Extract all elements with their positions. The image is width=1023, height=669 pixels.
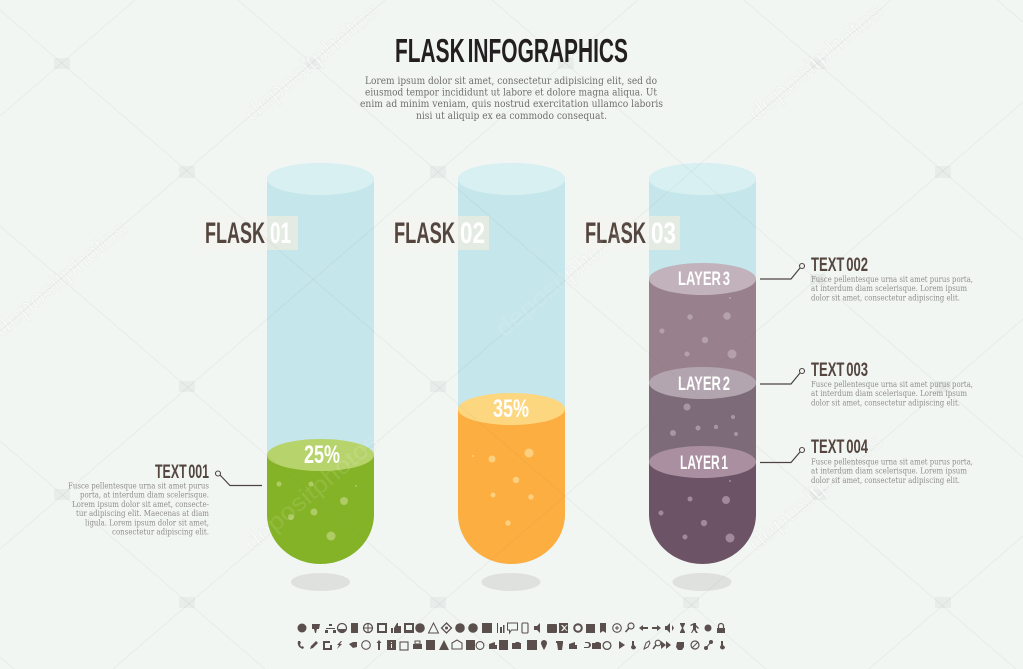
- body 001: ligula. Lorem ipsum dolor sit amet,: [85, 518, 209, 528]
- flask 2 bubbles: [472, 448, 534, 526]
- intro paragraph: nisi ut aliquip ex ea commodo consequat.: [416, 111, 607, 122]
- flask 1 percentage: 25%: [304, 441, 340, 469]
- body 003: [811, 380, 973, 408]
- flask 3 glass rim: [649, 163, 756, 195]
- watermark overlay: depositphotos: [239, 428, 385, 557]
- layer 2 label: LAYER 2: [678, 374, 730, 395]
- layer 2 body: [649, 383, 756, 470]
- shadow: flask 3: [672, 573, 732, 591]
- flask 2 liquid: [458, 409, 565, 564]
- flask 1 bubbles: [276, 482, 357, 540]
- flask 1 glass: [267, 163, 374, 564]
- intro paragraph: enim ad minim veniam, quis nostrud exercitation ullamco laboris: [360, 99, 663, 110]
- callout: text 001: [68, 462, 262, 536]
- watermark: depositphotos: [239, 428, 385, 557]
- watermark: depositphotos: [743, 0, 889, 127]
- shadow: flask 2: [482, 573, 540, 591]
- intro paragraph: Lorem ipsum dolor sit amet, consectetur adipisicing elit, sed do: [365, 76, 657, 87]
- body 002: dolor sit amet, consectetur adipiscing elit.: [811, 294, 960, 302]
- layer 3 body: [649, 279, 756, 390]
- body 004: Fusce pellentesque urna sit amet purus porta,: [811, 458, 973, 466]
- body 003: Fusce pellentesque urna sit amet purus porta,: [811, 380, 973, 389]
- icon row 2: [298, 640, 725, 650]
- connector dot 002: [800, 264, 804, 268]
- watermark overlay: depositphotos: [491, 214, 637, 343]
- connector dot 003: [800, 368, 804, 374]
- body 001: tur adipiscing elit. Maecenas at diam: [76, 509, 209, 518]
- layer 1 label: LAYER 1: [680, 453, 728, 474]
- label: flask 03: FLASK: [585, 217, 646, 250]
- body 004: at interdum diam scelerisque. Lorem ipsum: [811, 466, 967, 476]
- flask 3 bubbles: [658, 297, 738, 542]
- body 003: dolor sit amet, consectetur adipiscing elit.: [811, 398, 960, 408]
- layer 1 surface: [649, 446, 756, 478]
- callout: text 004: [760, 437, 973, 485]
- flask 3: [649, 163, 756, 564]
- body 003: at interdum diam scelerisque. Lorem ipsum: [811, 389, 967, 398]
- layer 1 body: [649, 462, 756, 564]
- heading 004: TEXT 004: [811, 437, 868, 458]
- flask 1 glass rim: [267, 163, 374, 195]
- title: FLASK INFOGRAPHICS: [395, 32, 628, 69]
- connector 003: [760, 373, 800, 384]
- connector 001: [220, 475, 262, 486]
- icon row 1: [298, 623, 725, 633]
- flask 2 liquid surface: [458, 393, 565, 425]
- flask 3 glass: [649, 163, 756, 300]
- body 001: consectetur adipiscing elit.: [112, 528, 209, 536]
- body 002: Fusce pellentesque urna sit amet purus porta,: [811, 275, 973, 284]
- intro paragraph: [360, 76, 663, 122]
- body 002: [811, 275, 973, 302]
- flask 2 glass rim: [458, 163, 565, 195]
- layer 3 label: LAYER 3: [678, 269, 730, 290]
- watermark: depositphotos: [491, 214, 637, 343]
- connector dot 001: [216, 471, 220, 476]
- intro paragraph: eiusmod tempor incididunt ut labore et dolore magna aliqua. Ut: [365, 88, 657, 98]
- connector 002: [760, 268, 800, 279]
- connector 004: [760, 452, 800, 462]
- shadow: flask 1: [291, 573, 350, 591]
- label: flask 01: FLASK: [205, 217, 265, 250]
- body 004: dolor sit amet, consectetur adipiscing elit.: [811, 476, 960, 485]
- body 001: Lorem ipsum dolor sit amet, consecte-: [72, 500, 209, 509]
- flask 2: [458, 163, 565, 564]
- flask 2 percentage: 35%: [493, 395, 529, 423]
- label: flask 01: 01: [270, 217, 291, 250]
- heading 001: TEXT 001: [155, 462, 209, 483]
- body 001: Fusce pellentesque urna sit amet purus: [68, 482, 209, 490]
- flask 2 glass: [458, 163, 565, 564]
- body 002: at interdum diam scelerisque. Lorem ipsum: [811, 284, 967, 293]
- connector dot 004: [800, 448, 804, 452]
- watermark: depositphotos: [743, 428, 889, 557]
- flask 1 liquid: [267, 455, 374, 564]
- heading 002: TEXT 002: [811, 255, 868, 276]
- callout: text 002: [760, 255, 973, 302]
- heading 003: TEXT 003: [811, 360, 868, 381]
- icon strip: [298, 623, 725, 650]
- layer 2 surface: [649, 367, 756, 399]
- flask 1: [267, 163, 374, 564]
- watermark: depositphotos: [239, 0, 385, 127]
- label: flask 03: 03: [651, 217, 676, 250]
- label: flask 02: 02: [460, 217, 485, 250]
- layer 3 surface: [649, 263, 756, 295]
- callout: text 003: [760, 360, 973, 408]
- body 004: [811, 458, 973, 485]
- body 001: [68, 482, 209, 536]
- label: flask 02: FLASK: [394, 217, 455, 250]
- body 001: porta, at interdum diam scelerisque.: [80, 490, 209, 500]
- flask 1 liquid surface: [267, 439, 374, 471]
